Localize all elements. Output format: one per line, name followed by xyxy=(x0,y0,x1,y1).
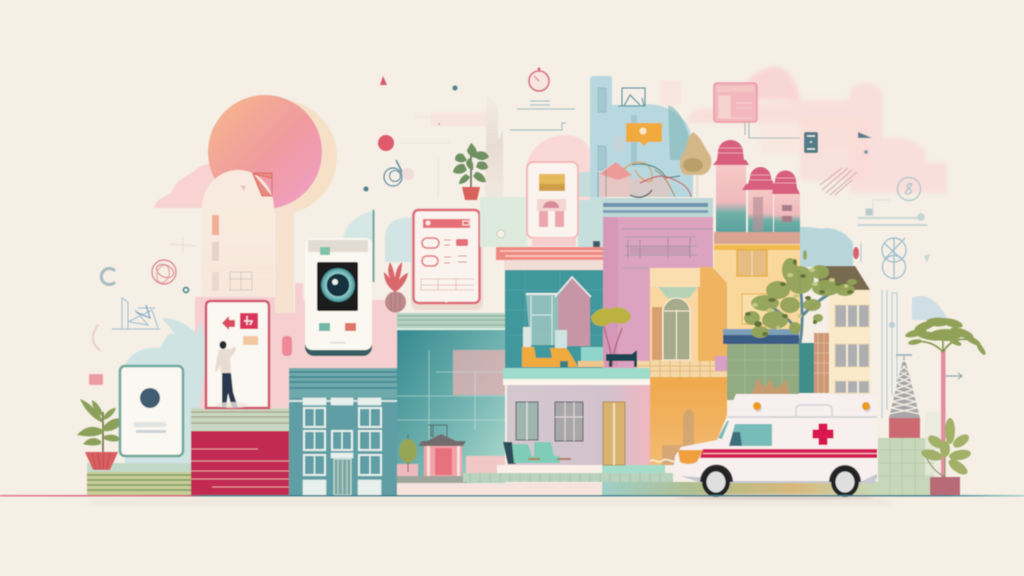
tree: large foliage xyxy=(744,250,857,343)
connector lines xyxy=(745,122,800,138)
tablet: teal with dark button xyxy=(120,366,183,456)
building: light blue top xyxy=(590,76,693,197)
plant: balcony tree xyxy=(591,307,631,367)
red cross xyxy=(812,424,834,445)
balcony: brick tile xyxy=(637,361,727,377)
ambulance xyxy=(673,394,877,500)
tablet: coral dashboard xyxy=(411,210,483,310)
icon: faint pink pin xyxy=(661,81,681,105)
plant: dried leaves on ambulance xyxy=(752,378,790,394)
cloud: pink left xyxy=(154,164,250,208)
building: cream right xyxy=(799,266,870,394)
phone: camera xyxy=(305,238,372,356)
icon: ladder lines right xyxy=(858,200,927,225)
wavy detail xyxy=(650,459,678,462)
pink building xyxy=(603,217,713,373)
icon: small red box xyxy=(89,374,103,385)
sign: orange xyxy=(626,123,662,146)
cloud: blue haze xyxy=(800,227,853,267)
sage block stripes xyxy=(397,313,505,331)
icon: message bubble xyxy=(243,336,258,345)
icon: stethoscope xyxy=(384,160,414,186)
plant: top center xyxy=(453,143,489,200)
apartment: teal room with pink house xyxy=(505,270,603,368)
building: orange with arched window xyxy=(650,267,727,366)
building: orange lower xyxy=(650,377,727,465)
sofa xyxy=(503,442,571,464)
block: striped sage and crimson xyxy=(191,408,289,495)
icon: teal phone xyxy=(804,132,818,153)
phone: red frame with man xyxy=(206,301,269,408)
right side fine lines and blue cloud xyxy=(882,290,962,418)
icon: red square sign xyxy=(240,313,258,329)
siren lights xyxy=(753,402,871,412)
base strips: white, sage tile, mint xyxy=(397,465,878,495)
roof: blue stripes xyxy=(603,198,713,217)
cloudscape: top right pink xyxy=(687,67,947,193)
backdrop: teal foliage behind left tablet xyxy=(125,318,205,465)
icon: clock xyxy=(529,68,549,91)
icon: red arrow xyxy=(222,316,235,330)
block: sage tile right xyxy=(878,412,947,495)
panel: pink UI window xyxy=(714,83,757,122)
icon: hatch scribble xyxy=(820,168,857,195)
plant: striped cone in pot xyxy=(889,355,920,438)
bush: tan xyxy=(680,132,711,197)
block: green with navy roof xyxy=(715,329,799,400)
tree: small xyxy=(399,434,417,472)
ground line xyxy=(0,495,1024,496)
plant: pink frond xyxy=(384,262,408,312)
icon: framed picture xyxy=(618,88,645,106)
mini towers: pink roofs xyxy=(713,140,800,232)
window left xyxy=(516,402,538,440)
plant: broad leaves in pot xyxy=(920,418,972,496)
icon: knot symbol xyxy=(882,238,930,278)
icon: camera lens xyxy=(317,262,358,311)
tower with dome xyxy=(202,170,274,300)
door xyxy=(603,402,625,465)
window right xyxy=(555,402,583,441)
icon: flag and dot xyxy=(858,132,872,154)
balcony floor xyxy=(503,368,650,385)
ambulance window xyxy=(718,421,772,446)
headlight xyxy=(678,450,703,464)
figure: man xyxy=(215,341,248,408)
houses with wires xyxy=(598,162,691,197)
plant: left potted xyxy=(77,399,124,470)
icon: small markers xyxy=(364,76,486,197)
wheel arches and wheels xyxy=(700,464,861,497)
plant: tall tree xyxy=(904,316,987,477)
building: teal with windows xyxy=(289,368,397,495)
decorative teal arches and mast xyxy=(343,210,413,282)
icon: pink plug xyxy=(282,336,292,356)
roof handle xyxy=(796,405,832,417)
phone: pink outline top xyxy=(527,162,578,246)
awning: coral stripes xyxy=(496,230,603,270)
top lines xyxy=(510,101,575,130)
icon: blue line diagram xyxy=(112,298,160,329)
furniture: balcony sofa, chair, piano xyxy=(522,347,637,367)
beige fading column xyxy=(485,94,503,197)
backdrop: pink stepped wall xyxy=(195,283,397,408)
sun with crescent xyxy=(208,95,337,313)
apartment: lilac ground floor xyxy=(503,385,650,465)
building: yellow xyxy=(714,232,800,332)
house: small pink xyxy=(397,425,467,483)
red stripe xyxy=(700,449,877,458)
block: large teal gradient xyxy=(397,330,505,495)
icon: red dot xyxy=(378,135,394,151)
icon: circled symbol xyxy=(898,178,920,200)
light backdrop behind top phone xyxy=(480,135,605,247)
ground shadow xyxy=(90,498,890,506)
icon: left small decorations xyxy=(93,238,196,350)
base: stripes under left tablet xyxy=(87,463,191,495)
scene group xyxy=(0,67,1024,506)
windows xyxy=(303,398,381,495)
icon: red bulb xyxy=(853,243,861,262)
